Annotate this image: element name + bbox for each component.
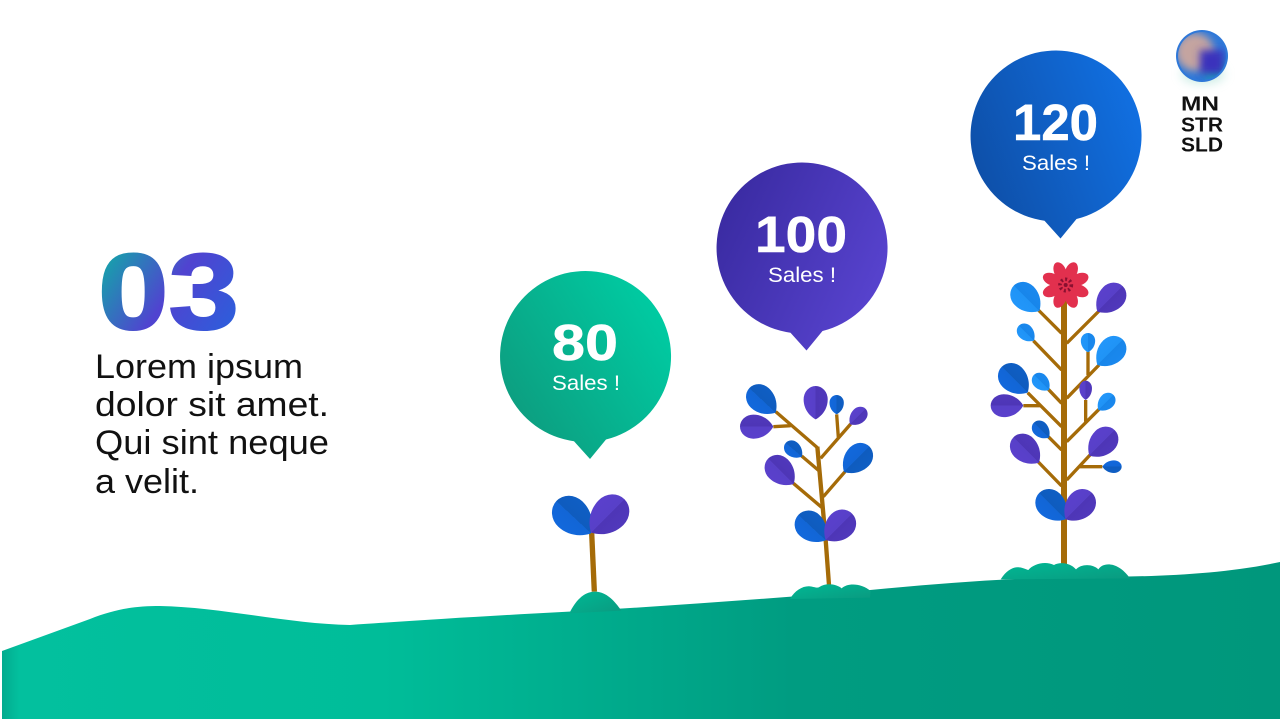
flower bbox=[1041, 260, 1090, 310]
mounds bbox=[1001, 563, 1130, 579]
logo bbox=[1176, 30, 1228, 156]
plant: flowering tree bbox=[991, 260, 1132, 579]
leaves bbox=[991, 276, 1132, 529]
bubble: 80 sales bbox=[500, 271, 671, 459]
bubble: 100 sales: Sales ! bbox=[768, 264, 836, 287]
bubble: 120 sales: 120 bbox=[1013, 94, 1098, 151]
big number 03: 03 bbox=[98, 231, 239, 352]
bubble: 120 sales: Sales ! bbox=[1022, 152, 1090, 175]
logo: MN bbox=[1181, 92, 1219, 116]
ground hill bbox=[2, 562, 1280, 719]
bubble: 100 sales: 100 bbox=[755, 206, 847, 263]
body text: a velit. bbox=[95, 463, 199, 501]
body text bbox=[95, 348, 329, 501]
bubble: 80 sales: Sales ! bbox=[552, 372, 620, 395]
logo: SLD bbox=[1181, 134, 1223, 156]
plant: sprout bbox=[544, 487, 637, 613]
logo: STR bbox=[1181, 114, 1223, 136]
plant: young tree bbox=[740, 378, 879, 599]
body text: Qui sint neque bbox=[95, 424, 329, 462]
body text: Lorem ipsum bbox=[95, 348, 303, 386]
body text: dolor sit amet. bbox=[95, 386, 329, 424]
bubble: 120 sales bbox=[971, 50, 1142, 238]
bubble: 100 sales bbox=[717, 162, 888, 350]
bubble: 80 sales: 80 bbox=[552, 314, 618, 371]
